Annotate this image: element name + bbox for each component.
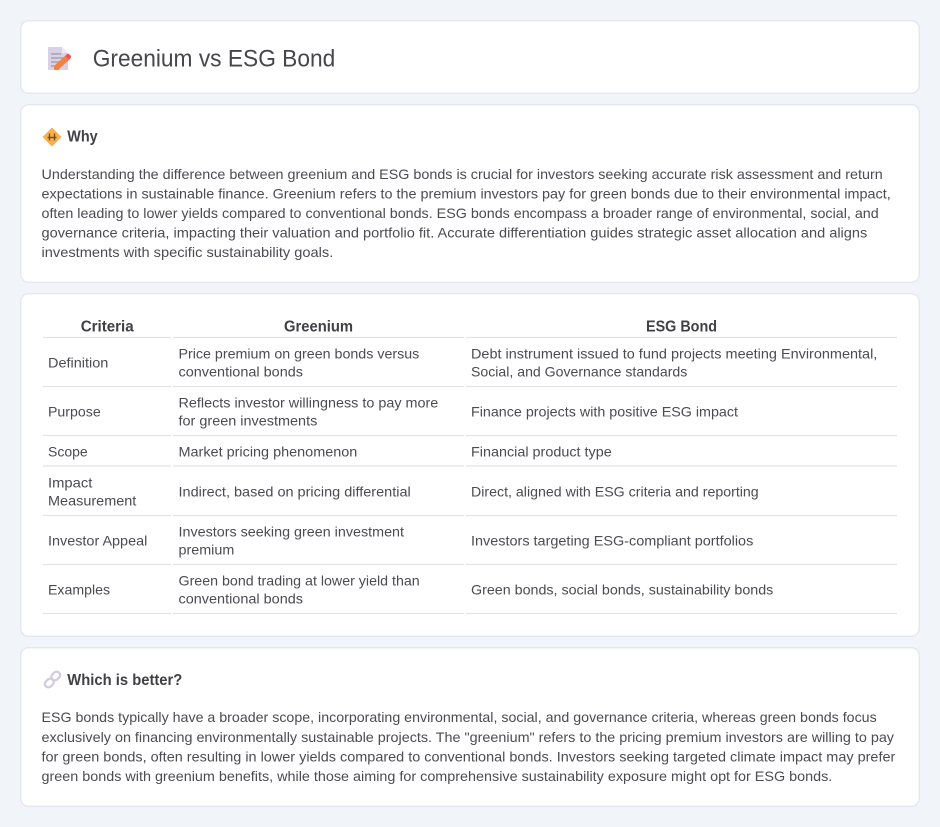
heading: which is better: Which is better? [67, 672, 182, 689]
table row: impact measurement: Direct, aligned with ESG criteria and reporting [471, 484, 759, 500]
table row: investor appeal [48, 524, 753, 558]
table row: definition: Social, and Governance standards [471, 364, 687, 380]
table row: purpose: for green investments [178, 413, 317, 429]
text block: why paragraph: governance criteria, impacting their valuation and portfolio fit. Accurate differentiation guides strategic asset allocation and aligns [42, 224, 867, 240]
table row: examples: conventional bonds [178, 591, 303, 607]
text block: why paragraph: expectations in sustainable finance. Greenium refers to the premium investors pay for green bonds due to their environmental impact, [42, 186, 891, 202]
text block: which is better paragraph: exclusively on financing environmentally sustainable projects. The "greenium" refers to the pricing premium investors are willing to pay [42, 729, 894, 745]
table row: examples: Examples [48, 582, 110, 598]
text block: which is better paragraph [42, 709, 896, 784]
panel: header [21, 21, 919, 93]
table row: scope: Financial product type [471, 444, 612, 460]
table row: purpose: Finance projects with positive ESG impact [471, 404, 738, 420]
text block: which is better paragraph: for green bonds, often resulting in lower yields compared to conventional bonds. Investors seeking targeted climate impact may prefer [42, 748, 896, 764]
text block: why paragraph: Understanding the difference between greenium and ESG bonds is crucial for investors seeking accurate risk assessment and return [42, 166, 883, 182]
table row: scope [48, 444, 612, 460]
table row: scope: Scope [48, 444, 88, 460]
table header row [81, 319, 717, 336]
table header row: Greenium [284, 319, 353, 336]
table row: definition: Definition [48, 355, 108, 371]
table row: investor appeal: Investors seeking green investment [178, 524, 404, 540]
table row: investor appeal: Investor Appeal [48, 533, 147, 549]
table row: definition: conventional bonds [178, 364, 303, 380]
table row: impact measurement: Measurement [48, 493, 136, 509]
table row: investor appeal: premium [178, 542, 234, 558]
heading: why: Why [67, 129, 98, 146]
icon: warning diamond [44, 128, 60, 146]
table row: impact measurement: Impact [48, 475, 92, 491]
table row: scope: Market pricing phenomenon [178, 444, 357, 460]
table row: purpose [48, 395, 738, 429]
table row: purpose: Purpose [48, 404, 101, 420]
table header row: ESG Bond [646, 319, 717, 336]
table row: definition: Price premium on green bonds versus [178, 346, 419, 362]
text block: which is better paragraph: green bonds with greenium benefits, while those aiming for comprehensive sustainability exposure might opt for ESG bonds. [42, 768, 832, 784]
table row: purpose: Reflects investor willingness to pay more [178, 395, 439, 411]
text block: why paragraph: often leading to lower yields compared to conventional bonds. ESG bonds encompass a broader range of environmental, social, and [42, 205, 879, 221]
text block: which is better paragraph: ESG bonds typically have a broader scope, incorporating environmental, social, and governance criteria, whereas green bonds focus [42, 709, 877, 725]
panel: comparison table [21, 294, 919, 636]
table row: examples [48, 573, 773, 607]
table row: definition [48, 346, 877, 380]
table row: examples: Green bonds, social bonds, sustainability bonds [471, 582, 773, 598]
table row: examples: Green bond trading at lower yield than [178, 573, 420, 589]
text block: why paragraph: investments with specific sustainability goals. [42, 244, 333, 260]
icon: memo with pencil [48, 47, 71, 70]
panel: why [21, 105, 919, 282]
table header row: Criteria [81, 319, 134, 336]
table row: investor appeal: Investors targeting ESG-compliant portfolios [471, 533, 753, 549]
table row: impact measurement [48, 475, 759, 509]
table row: definition: Debt instrument issued to fund projects meeting Environmental, [471, 346, 877, 362]
panel: which is better [21, 648, 919, 806]
title: Greenium vs ESG Bond [93, 46, 335, 73]
text block: why paragraph [42, 166, 891, 260]
icon: link [43, 670, 62, 689]
table row: impact measurement: Indirect, based on pricing differential [178, 484, 411, 500]
